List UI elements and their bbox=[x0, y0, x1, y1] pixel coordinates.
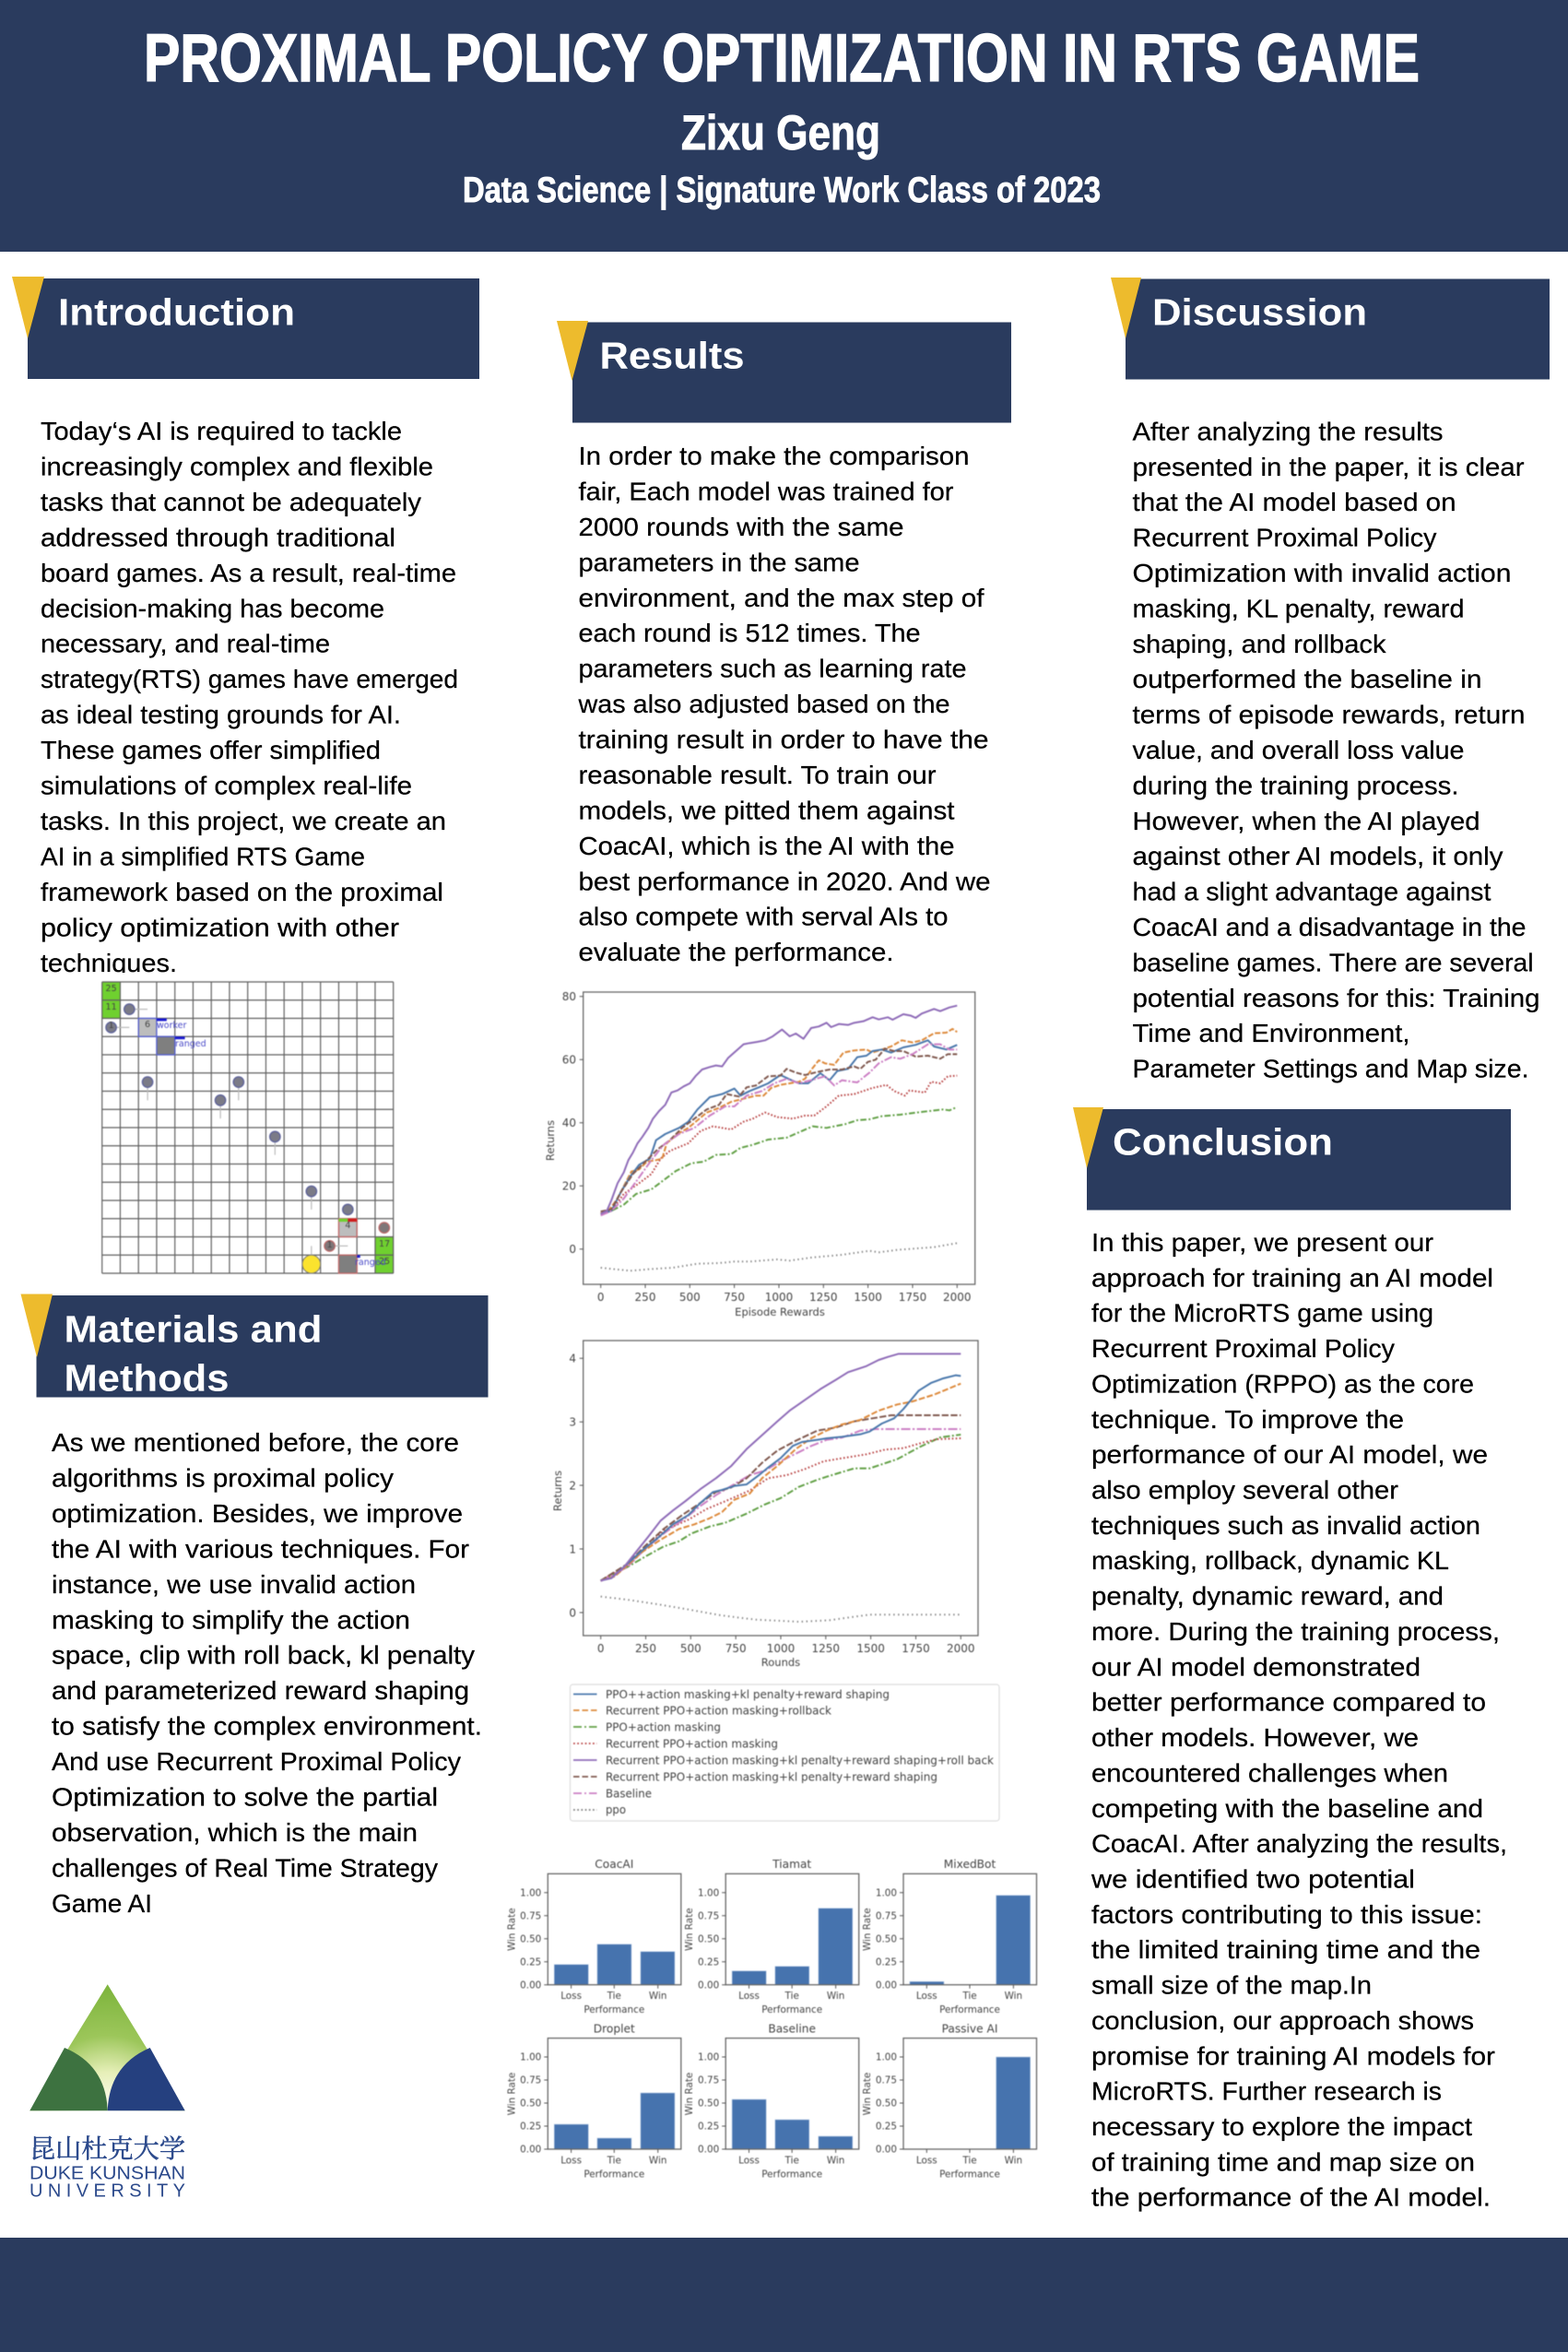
line chart: rounds: 1 bbox=[569, 1542, 576, 1555]
logo: Duke Kunshan University: 昆山杜克大学 bbox=[29, 2134, 185, 2164]
logo: Duke Kunshan University: DUKE KUNSHAN bbox=[29, 2163, 185, 2183]
bar chart: Passive AI: Win bbox=[1005, 2156, 1022, 2167]
bar chart: MixedBot: Tie bbox=[961, 1991, 977, 2002]
bar chart: Passive AI: 0.00 bbox=[876, 2145, 897, 2156]
text block: conclusion: conclusion, our approach shows bbox=[1091, 2006, 1474, 2035]
text block: introduction: tasks. In this project, we create an bbox=[41, 807, 446, 835]
text block: discussion: However, when the AI played bbox=[1132, 807, 1480, 835]
bar chart: Droplet: 1.00 bbox=[520, 2052, 541, 2063]
text block: discussion: presented in the paper, it is clear bbox=[1132, 453, 1525, 481]
line chart: episode rewards: Episode Rewards bbox=[735, 1306, 825, 1318]
bar chart: Tiamat: Loss bbox=[738, 1991, 760, 2002]
bar chart: Baseline: 0.50 bbox=[698, 2098, 719, 2110]
text block: results: training result in order to have the bbox=[579, 725, 988, 754]
bar chart: CoacAI: Performance bbox=[584, 2004, 644, 2015]
chart legend bbox=[570, 1684, 999, 1821]
bar chart: CoacAI: Win bbox=[649, 1991, 666, 2002]
bar chart: CoacAI: 0.00 bbox=[520, 1980, 541, 1991]
text block: results: evaluate the performance. bbox=[579, 938, 894, 966]
text block: materials and methods: to satisfy the complex environment. bbox=[52, 1712, 482, 1741]
line chart: episode rewards: 1250 bbox=[809, 1291, 838, 1304]
text block: results bbox=[577, 442, 990, 966]
line chart: rounds: 3 bbox=[569, 1416, 576, 1429]
line chart: episode rewards: 60 bbox=[562, 1053, 576, 1066]
logo: Duke Kunshan University bbox=[29, 1984, 185, 2202]
text block: introduction: simulations of complex real-life bbox=[41, 771, 412, 800]
bar chart: CoacAI: 1.00 bbox=[520, 1887, 541, 1898]
bar chart: MixedBot: 0.25 bbox=[876, 1956, 897, 1968]
text block: introduction: strategy(RTS) games have emerged bbox=[41, 665, 458, 693]
bar chart: CoacAI bbox=[506, 1858, 681, 2015]
bar chart: Baseline: Baseline bbox=[768, 2022, 816, 2035]
bar chart: Tiamat: Tiamat bbox=[772, 1858, 811, 1871]
heading: results bbox=[557, 321, 1011, 422]
bar chart: Passive AI: Performance bbox=[939, 2169, 1000, 2180]
text block: results: parameters in the same bbox=[579, 548, 859, 576]
bar chart: Baseline: Win Rate bbox=[684, 2073, 695, 2115]
bar chart: Passive AI: Passive AI bbox=[942, 2022, 997, 2035]
bar chart: Tiamat: 0.00 bbox=[698, 1980, 719, 1991]
text block: conclusion: we identified two potential bbox=[1091, 1864, 1415, 1894]
text block: discussion: value, and overall loss value bbox=[1132, 736, 1464, 764]
text block: conclusion: techniques such as invalid action bbox=[1091, 1511, 1480, 1540]
bar chart: Baseline: Performance bbox=[761, 2169, 822, 2180]
panel: materials and methods bbox=[20, 1294, 489, 1918]
text block: conclusion: CoacAI. After analyzing the results, bbox=[1091, 1829, 1507, 1858]
bar chart: Passive AI: 0.75 bbox=[876, 2075, 897, 2086]
line chart: rounds bbox=[551, 1341, 978, 1669]
bar chart: Passive AI: Loss bbox=[916, 2156, 937, 2167]
bar chart: Droplet: 0.75 bbox=[520, 2075, 541, 2086]
text block: materials and methods: Optimization to solve the partial bbox=[52, 1783, 438, 1811]
bar chart: Droplet: Performance bbox=[584, 2169, 644, 2180]
text block: discussion: Parameter Settings and Map size. bbox=[1132, 1055, 1528, 1083]
text block: discussion: Recurrent Proximal Policy bbox=[1132, 524, 1436, 552]
line chart: rounds: Returns bbox=[551, 1471, 564, 1511]
heading: materials and methods: Methods bbox=[65, 1357, 229, 1400]
text block: discussion: After analyzing the results bbox=[1132, 417, 1444, 445]
text block: conclusion: In this paper, we present our bbox=[1091, 1228, 1433, 1257]
text block: conclusion: the limited training time and the bbox=[1091, 1935, 1480, 1964]
text block: conclusion: the performance of the AI model. bbox=[1091, 2183, 1491, 2212]
bar chart: Tiamat: 0.25 bbox=[698, 1956, 719, 1968]
line chart: rounds: 2000 bbox=[947, 1642, 975, 1655]
game map screenshot: ranged bbox=[355, 1258, 386, 1268]
chart legend: ppo bbox=[606, 1803, 626, 1816]
text block: discussion: baseline games. There are several bbox=[1132, 948, 1534, 976]
bar chart: Droplet: Tie bbox=[607, 2156, 621, 2167]
bar chart: Baseline: Loss bbox=[738, 2156, 760, 2167]
text block: materials and methods: challenges of Real Time Strategy bbox=[52, 1853, 438, 1882]
bar chart: Baseline: 1.00 bbox=[698, 2052, 719, 2063]
bar chart: CoacAI: Win Rate bbox=[506, 1908, 517, 1951]
text block: introduction: decision-making has become bbox=[41, 594, 384, 622]
line chart: episode rewards: 0 bbox=[569, 1243, 576, 1256]
game map screenshot: 25 bbox=[379, 1257, 390, 1267]
line chart: episode rewards: 250 bbox=[635, 1291, 655, 1304]
chart legend: Recurrent PPO+action masking+kl penalty+reward shaping bbox=[606, 1770, 937, 1783]
text block: conclusion: competing with the baseline and bbox=[1091, 1794, 1483, 1823]
text block: materials and methods: space, clip with roll back, kl penalty bbox=[52, 1641, 475, 1670]
text block: discussion: potential reasons for this: Training bbox=[1132, 984, 1539, 1012]
line chart: rounds: 1500 bbox=[856, 1642, 885, 1655]
panel: results bbox=[557, 321, 1011, 966]
text block: results: 2000 rounds with the same bbox=[579, 513, 903, 541]
text block: conclusion: technique. To improve the bbox=[1091, 1405, 1404, 1434]
game map screenshot: worker bbox=[157, 1021, 186, 1031]
chart legend: PPO+action masking bbox=[606, 1720, 721, 1733]
bar chart: Tiamat: 1.00 bbox=[698, 1887, 719, 1898]
bar chart: Passive AI: 0.25 bbox=[876, 2122, 897, 2133]
game map screenshot: 11 bbox=[106, 1002, 117, 1012]
text block: results: each round is 512 times. The bbox=[579, 619, 920, 647]
heading: discussion: Discussion bbox=[1152, 291, 1367, 334]
text block: conclusion: small size of the map.In bbox=[1091, 1971, 1372, 2000]
text block: conclusion bbox=[1091, 1228, 1507, 2212]
text block: results: In order to make the comparison bbox=[579, 442, 970, 470]
bar chart: Baseline: 0.25 bbox=[698, 2122, 719, 2133]
line chart: rounds: 1750 bbox=[902, 1642, 930, 1655]
line chart: rounds: 2 bbox=[569, 1479, 576, 1492]
bar chart: CoacAI: 0.50 bbox=[520, 1933, 541, 1944]
bar chart: Droplet bbox=[506, 2022, 681, 2180]
bar charts: win rates bbox=[506, 1858, 1036, 2180]
bar chart: MixedBot: MixedBot bbox=[944, 1858, 996, 1871]
bar chart: Passive AI: Win Rate bbox=[862, 2073, 873, 2115]
text block: conclusion: other models. However, we bbox=[1091, 1723, 1419, 1752]
line chart: rounds: 1250 bbox=[812, 1642, 840, 1655]
text block: conclusion: performance of our AI model, we bbox=[1091, 1440, 1488, 1469]
text block: results: was also adjusted based on the bbox=[577, 690, 949, 718]
line chart: episode rewards: 20 bbox=[562, 1180, 576, 1193]
text block: discussion: that the AI model based on bbox=[1132, 488, 1456, 516]
bar chart: Droplet: 0.25 bbox=[520, 2122, 541, 2133]
text block: results: reasonable result. To train our bbox=[579, 761, 937, 789]
bar chart: MixedBot: Win Rate bbox=[862, 1908, 873, 1951]
bar chart: Droplet: Droplet bbox=[594, 2022, 635, 2035]
bar chart: Baseline: 0.00 bbox=[698, 2145, 719, 2156]
text block: results: parameters such as learning rate bbox=[579, 655, 966, 683]
text block: materials and methods: observation, which is the main bbox=[52, 1818, 418, 1847]
text block: materials and methods: As we mentioned before, the core bbox=[52, 1428, 459, 1457]
heading: introduction bbox=[12, 277, 479, 379]
text block: introduction: addressed through traditional bbox=[41, 523, 395, 551]
text block: introduction bbox=[41, 417, 458, 977]
text block: materials and methods bbox=[52, 1428, 482, 1918]
text block: introduction: techniques. bbox=[41, 949, 177, 977]
line chart: episode rewards: 80 bbox=[562, 990, 576, 1003]
text block: conclusion: of training time and map size on bbox=[1091, 2147, 1475, 2176]
panel: introduction bbox=[12, 277, 479, 977]
text block: discussion: shaping, and rollback bbox=[1132, 630, 1387, 658]
line chart: rounds: 0 bbox=[597, 1642, 605, 1655]
affiliation: Data Science | Signature Work Class of 2023 bbox=[463, 171, 1101, 210]
bar chart: Droplet: 0.50 bbox=[520, 2098, 541, 2110]
text block: conclusion: also employ several other bbox=[1091, 1475, 1398, 1505]
chart legend: Recurrent PPO+action masking bbox=[606, 1737, 778, 1750]
heading: conclusion: Conclusion bbox=[1113, 1121, 1333, 1164]
bar chart: CoacAI: Tie bbox=[607, 1991, 621, 2002]
bar chart: Tiamat: Performance bbox=[761, 2004, 822, 2015]
text block: conclusion: masking, rollback, dynamic KL bbox=[1091, 1546, 1449, 1575]
text block: conclusion: promise for training AI models for bbox=[1091, 2041, 1495, 2070]
line chart: episode rewards: 2000 bbox=[943, 1291, 972, 1304]
text block: conclusion: approach for training an AI model bbox=[1091, 1263, 1493, 1292]
text block: materials and methods: and parameterized reward shaping bbox=[52, 1676, 469, 1705]
text block: discussion: Optimization with invalid action bbox=[1132, 559, 1512, 587]
line chart: rounds: 750 bbox=[725, 1642, 747, 1655]
text block: introduction: increasingly complex and flexible bbox=[41, 452, 433, 480]
line chart: episode rewards bbox=[544, 990, 975, 1318]
bar chart: Baseline: 0.75 bbox=[698, 2075, 719, 2086]
text block: introduction: tasks that cannot be adequately bbox=[41, 488, 421, 516]
footer band bbox=[0, 2238, 1568, 2352]
text block: discussion: CoacAI and a disadvantage in the bbox=[1132, 913, 1527, 941]
text block: conclusion: penalty, dynamic reward, and bbox=[1091, 1582, 1444, 1611]
text block: materials and methods: masking to simplify the action bbox=[52, 1605, 410, 1634]
text block: introduction: policy optimization with other bbox=[41, 913, 399, 941]
text block: results: also compete with serval AIs to bbox=[579, 903, 948, 931]
bar chart: Passive AI bbox=[862, 2022, 1036, 2180]
text block: materials and methods: algorithms is proximal policy bbox=[52, 1463, 394, 1492]
bar chart: Passive AI: 1.00 bbox=[876, 2052, 897, 2063]
heading: results: Results bbox=[599, 334, 745, 376]
game map screenshot: 6 bbox=[145, 1020, 150, 1030]
line chart: episode rewards: 1750 bbox=[899, 1291, 926, 1304]
bar chart: MixedBot: 0.50 bbox=[876, 1933, 897, 1944]
text block: conclusion: our AI model demonstrated bbox=[1091, 1652, 1421, 1681]
text block: discussion: had a slight advantage against bbox=[1132, 878, 1491, 906]
bar chart: Tiamat: 0.75 bbox=[698, 1910, 719, 1921]
line chart: episode rewards: 750 bbox=[724, 1291, 745, 1304]
bar chart: Droplet: Win bbox=[649, 2156, 666, 2167]
heading: introduction: Introduction bbox=[58, 291, 295, 334]
bar chart: Passive AI: Tie bbox=[961, 2156, 977, 2167]
line chart: episode rewards: 0 bbox=[597, 1291, 605, 1304]
bar chart: CoacAI: 0.75 bbox=[520, 1910, 541, 1921]
heading: discussion bbox=[1111, 278, 1550, 380]
text block: conclusion: necessary to explore the impact bbox=[1091, 2112, 1472, 2141]
text block: discussion: terms of episode rewards, return bbox=[1132, 701, 1525, 729]
line chart: rounds: Rounds bbox=[761, 1656, 800, 1669]
line chart: rounds: 0 bbox=[569, 1606, 576, 1619]
bar chart: MixedBot: 0.00 bbox=[876, 1980, 897, 1991]
bar chart: MixedBot: Loss bbox=[916, 1991, 937, 2002]
bar chart: Tiamat: Tie bbox=[784, 1991, 799, 2002]
text block: discussion: Time and Environment, bbox=[1132, 1019, 1410, 1047]
bar chart: Baseline: Tie bbox=[784, 2156, 799, 2167]
bar chart: CoacAI: Loss bbox=[560, 1991, 582, 2002]
text block: introduction: These games offer simplified bbox=[41, 736, 381, 764]
game map screenshot: ranged bbox=[175, 1039, 206, 1049]
bar chart: CoacAI: 0.25 bbox=[520, 1956, 541, 1968]
chart legend: PPO++action masking+kl penalty+reward shaping bbox=[606, 1688, 890, 1701]
bar chart: CoacAI: CoacAI bbox=[595, 1858, 633, 1871]
game map screenshot: 1 bbox=[327, 1240, 333, 1250]
text block: introduction: framework based on the proximal bbox=[41, 878, 443, 906]
chart legend: Recurrent PPO+action masking+rollback bbox=[606, 1704, 831, 1717]
game map screenshot: 17 bbox=[379, 1239, 390, 1249]
bar chart: MixedBot bbox=[862, 1858, 1036, 2015]
text block: introduction: as ideal testing grounds for AI. bbox=[41, 701, 401, 729]
bar chart: MixedBot: Performance bbox=[939, 2004, 1000, 2015]
chart legend: Baseline bbox=[606, 1787, 652, 1800]
text block: results: CoacAI, which is the AI with the bbox=[579, 832, 955, 860]
text block: discussion: masking, KL penalty, reward bbox=[1132, 594, 1464, 622]
bar chart: MixedBot: Win bbox=[1005, 1991, 1022, 2002]
game map screenshot bbox=[102, 982, 394, 1273]
bar chart: Passive AI: 0.50 bbox=[876, 2098, 897, 2110]
line chart: rounds: 1000 bbox=[767, 1642, 795, 1655]
text block: discussion bbox=[1132, 417, 1539, 1083]
bar chart: Tiamat: Win Rate bbox=[684, 1908, 695, 1951]
panel: discussion bbox=[1111, 278, 1550, 1083]
game map screenshot: 1 bbox=[109, 1021, 114, 1031]
panel: conclusion bbox=[1073, 1107, 1511, 2212]
bar chart: Baseline: Win bbox=[827, 2156, 844, 2167]
text block: conclusion: MicroRTS. Further research is bbox=[1091, 2077, 1442, 2106]
header banner bbox=[0, 0, 1568, 252]
text block: results: models, we pitted them against bbox=[579, 796, 955, 824]
line chart: episode rewards: 40 bbox=[562, 1117, 576, 1129]
game map screenshot: 25 bbox=[106, 984, 117, 994]
bar chart: Baseline bbox=[684, 2022, 859, 2180]
text block: results: environment, and the max step of bbox=[579, 584, 984, 612]
bar chart: Tiamat: Win bbox=[827, 1991, 844, 2002]
text block: introduction: Today‘s AI is required to tackle bbox=[41, 417, 402, 445]
line chart: episode rewards: Returns bbox=[544, 1120, 557, 1161]
logo: Duke Kunshan University: UNIVERSITY bbox=[29, 2181, 185, 2202]
line chart: episode rewards: 500 bbox=[679, 1291, 701, 1304]
text block: conclusion: encountered challenges when bbox=[1091, 1758, 1448, 1787]
text block: materials and methods: Game AI bbox=[52, 1889, 152, 1918]
text block: conclusion: more. During the training process, bbox=[1091, 1617, 1500, 1646]
bar chart: Droplet: Loss bbox=[560, 2156, 582, 2167]
text block: conclusion: better performance compared to bbox=[1091, 1688, 1486, 1717]
author: Zixu Geng bbox=[681, 106, 880, 160]
text block: materials and methods: And use Recurrent Proximal Policy bbox=[52, 1747, 461, 1776]
text block: introduction: necessary, and real-time bbox=[41, 630, 330, 658]
line chart: episode rewards: 1500 bbox=[854, 1291, 882, 1304]
heading: conclusion bbox=[1073, 1107, 1511, 1210]
text block: discussion: outperformed the baseline in bbox=[1132, 665, 1482, 693]
bar chart: Droplet: 0.00 bbox=[520, 2145, 541, 2156]
text block: conclusion: Optimization (RPPO) as the core bbox=[1091, 1369, 1474, 1398]
bar chart: Tiamat: 0.50 bbox=[698, 1933, 719, 1944]
text block: materials and methods: instance, we use invalid action bbox=[52, 1570, 416, 1599]
line chart: rounds: 500 bbox=[680, 1642, 701, 1655]
text block: discussion: during the training process. bbox=[1132, 771, 1458, 799]
heading: materials and methods: Materials and bbox=[65, 1307, 323, 1350]
text block: introduction: board games. As a result, real-time bbox=[41, 559, 456, 587]
heading: materials and methods bbox=[20, 1294, 489, 1400]
text block: results: best performance in 2020. And we bbox=[579, 867, 990, 895]
text block: materials and methods: the AI with various techniques. For bbox=[52, 1534, 469, 1563]
text block: discussion: against other AI models, it only bbox=[1132, 842, 1503, 870]
line chart: rounds: 250 bbox=[635, 1642, 656, 1655]
text block: conclusion: for the MicroRTS game using bbox=[1091, 1299, 1433, 1328]
text block: materials and methods: optimization. Besides, we improve bbox=[52, 1499, 463, 1528]
text block: results: fair, Each model was trained for bbox=[579, 477, 953, 505]
text block: conclusion: factors contributing to this issue: bbox=[1091, 1900, 1482, 1929]
line chart: episode rewards: 1000 bbox=[765, 1291, 793, 1304]
bar chart: Droplet: Win Rate bbox=[506, 2073, 517, 2115]
text block: introduction: AI in a simplified RTS Game bbox=[41, 842, 365, 870]
bar chart: Tiamat bbox=[684, 1858, 859, 2015]
text block: conclusion: Recurrent Proximal Policy bbox=[1091, 1334, 1395, 1363]
line chart: rounds: 4 bbox=[569, 1353, 576, 1365]
bar chart: MixedBot: 0.75 bbox=[876, 1910, 897, 1921]
chart legend: Recurrent PPO+action masking+kl penalty+reward shaping+roll back bbox=[606, 1754, 994, 1767]
game map screenshot: 4 bbox=[345, 1221, 350, 1231]
bar chart: MixedBot: 1.00 bbox=[876, 1887, 897, 1898]
